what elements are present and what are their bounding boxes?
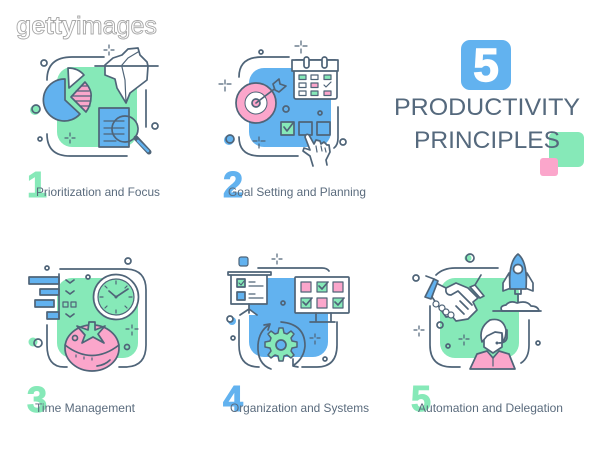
- background square: [57, 278, 138, 358]
- decorative dots and sparkles: [28, 258, 138, 350]
- heading 1: 1: [27, 164, 47, 205]
- heading 1: Prioritization and Focus: [36, 185, 160, 199]
- bar chart: [29, 274, 59, 319]
- heading 5: [411, 378, 563, 419]
- icon: pointing hand: [303, 134, 330, 166]
- checkboxes: [281, 122, 330, 135]
- number badge: [461, 40, 511, 90]
- heading 2: Goal Setting and Planning: [228, 185, 366, 199]
- panel: automation and delegation: [413, 254, 541, 369]
- presentation board: [228, 272, 271, 315]
- background square: [57, 67, 137, 147]
- heading 4: 4: [223, 378, 243, 419]
- icon: target with arrow: [236, 79, 286, 123]
- badge number: 5: [473, 39, 499, 91]
- decorative green square: [549, 132, 584, 167]
- heading 5: 5: [411, 378, 431, 419]
- pie chart: [43, 68, 91, 121]
- panel: time management: [28, 258, 146, 371]
- decorative dots and sparkles: [219, 41, 346, 148]
- panel: title: [394, 39, 584, 176]
- heading 4: Organization and Systems: [230, 401, 369, 415]
- decorative dots and sparkles: [227, 254, 327, 361]
- monitor checklist: [295, 277, 349, 322]
- title line 1: PRODUCTIVITY: [394, 94, 580, 121]
- heading 3: Time Management: [35, 401, 136, 415]
- icon: calendar: [292, 57, 338, 99]
- panel: prioritization and focus: [30, 45, 158, 156]
- background square: [249, 68, 331, 147]
- background square: [249, 278, 328, 357]
- icon: gear with cycle arrows: [258, 322, 305, 369]
- heading 3: 3: [27, 379, 47, 420]
- bracket outline: [239, 268, 337, 367]
- panel: organization and systems: [227, 254, 349, 369]
- bracket outline: [239, 57, 338, 156]
- heading 1: [27, 164, 160, 205]
- icon: support agent: [470, 319, 515, 369]
- heading 2: 2: [223, 164, 243, 205]
- decorative pink square: [540, 158, 558, 176]
- heading 2: [223, 164, 366, 205]
- icon: clock: [94, 274, 138, 320]
- decorative dots and sparkles: [413, 254, 540, 348]
- background square: [440, 278, 519, 358]
- checklist marks: [63, 280, 76, 317]
- document with magnifier: [99, 108, 149, 152]
- watermark logo: gettyimages: [16, 12, 157, 40]
- icon: tomato timer: [65, 322, 119, 371]
- bracket outline: [47, 269, 146, 367]
- heading 3: [27, 379, 136, 420]
- heading 4: [223, 378, 369, 419]
- heading 5: Automation and Delegation: [418, 401, 563, 415]
- bracket outline: [47, 57, 146, 156]
- icon: rocket launch: [493, 254, 541, 311]
- panel: goal setting and planning: [219, 41, 346, 166]
- icon: handshake: [425, 275, 484, 321]
- decorative dots and sparkles: [30, 45, 158, 143]
- icon: iceberg: [95, 48, 158, 103]
- title line 2: PRINCIPLES: [414, 127, 560, 154]
- bracket outline: [430, 268, 529, 367]
